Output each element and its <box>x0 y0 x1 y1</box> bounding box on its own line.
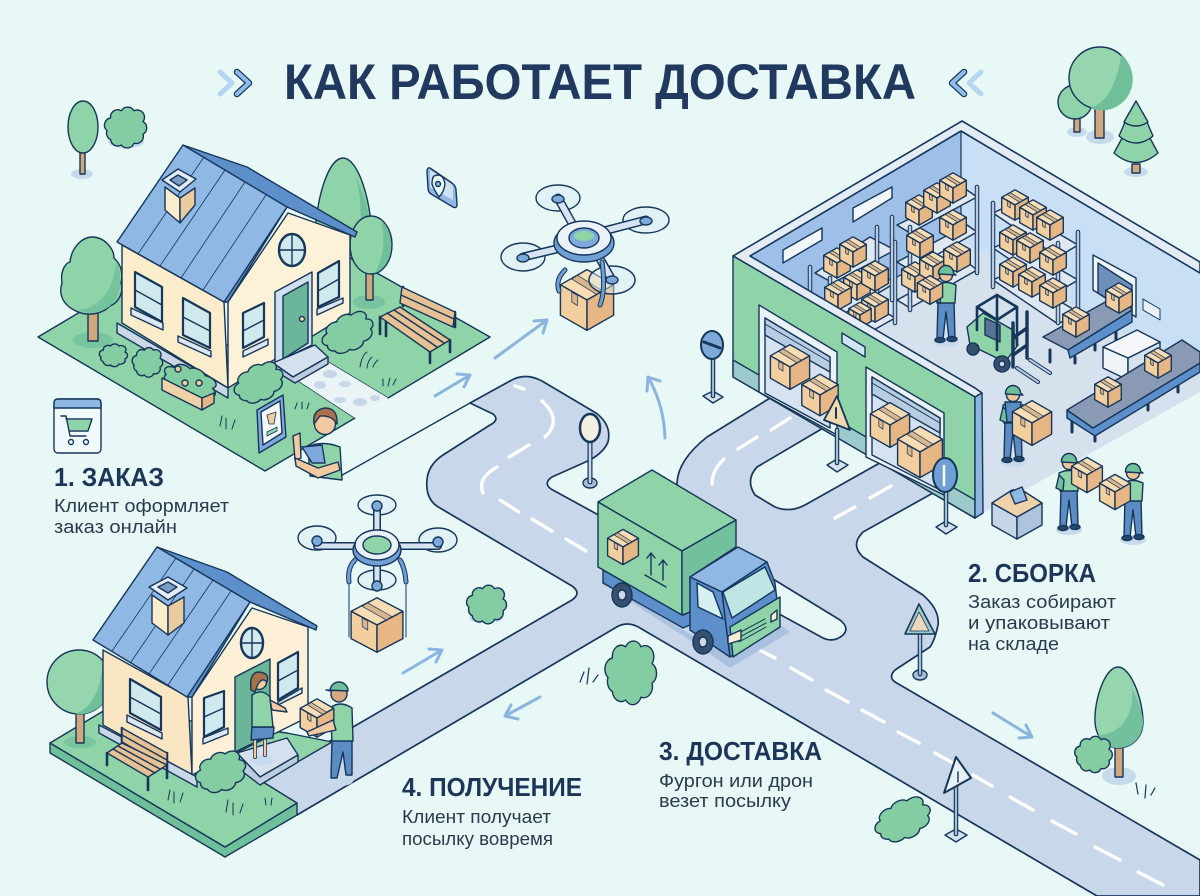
top-left tree and bush <box>68 101 147 179</box>
rear door and conveyor <box>1043 255 1136 363</box>
house walls <box>122 245 228 388</box>
frame <box>523 198 646 280</box>
title text: КАК РАБОТАЕТ ДОСТАВКА <box>284 54 916 110</box>
worker with box <box>1000 386 1052 467</box>
bottom bush <box>868 790 938 850</box>
warehouse <box>733 121 1200 518</box>
chimney <box>149 577 187 635</box>
wheels <box>612 583 632 607</box>
shelves with boxes <box>810 173 1078 335</box>
arrow 4 <box>403 649 442 673</box>
round window <box>241 628 263 658</box>
grass <box>168 790 272 815</box>
grille <box>730 597 780 657</box>
worker at shelf <box>917 266 959 347</box>
sign round blue near warehouse <box>701 331 723 403</box>
arrow 5 <box>505 697 540 719</box>
high windows <box>783 187 892 263</box>
step 3 text: 3. ДОСТАВКА <box>659 738 822 766</box>
rotors <box>501 185 669 294</box>
roof strip <box>157 547 317 697</box>
roof <box>117 145 287 302</box>
truck <box>597 470 790 668</box>
windows <box>723 567 775 618</box>
panel: house 1 order <box>38 145 490 480</box>
grass tufts <box>580 668 1155 798</box>
arrows <box>403 320 1032 738</box>
step 4 text: посылку вовремя <box>402 828 553 849</box>
roof <box>93 547 250 697</box>
lawn right <box>300 255 490 398</box>
left tree <box>61 237 122 348</box>
icon: location pin <box>427 168 457 208</box>
warning sign by dock <box>824 396 850 472</box>
floor <box>840 240 1200 513</box>
mid bushes <box>467 585 657 705</box>
arrow 3 <box>647 377 665 438</box>
step 4 text <box>402 774 582 849</box>
white crate <box>1103 330 1160 380</box>
dock door 1 <box>759 305 838 435</box>
motors <box>312 501 443 591</box>
chimney <box>162 169 196 223</box>
parcel <box>351 598 403 652</box>
roof seams <box>138 157 266 290</box>
green wall <box>733 256 975 518</box>
round window <box>279 234 305 266</box>
sign triangle bottom <box>944 757 971 842</box>
right tree and bush <box>1075 667 1143 785</box>
right interior wall <box>750 131 1200 513</box>
windows <box>131 261 343 357</box>
suspension lines <box>349 585 406 637</box>
step 1 text: 1. ЗАКАЗ <box>54 464 164 492</box>
panel: house 2 delivery <box>47 547 353 857</box>
dock door 2 <box>866 367 944 495</box>
motors <box>517 195 652 284</box>
wall note <box>1143 299 1160 320</box>
wall base <box>733 360 975 518</box>
truck road sign oval <box>580 414 600 488</box>
step 4 text: 4. ПОЛУЧЕНИЕ <box>402 774 582 802</box>
back tree <box>315 158 372 260</box>
lawn <box>50 710 332 857</box>
chassis <box>603 570 690 628</box>
step 4 text: Клиент получает <box>402 806 552 827</box>
shadow <box>597 580 790 668</box>
parcel <box>560 270 614 330</box>
path edge line <box>337 403 470 478</box>
foundation <box>99 725 197 787</box>
cargo box <box>598 470 736 551</box>
foundation <box>117 323 228 398</box>
arrow 1 <box>435 374 470 396</box>
drone 2 <box>298 495 457 652</box>
step 1 text: заказ онлайн <box>54 516 177 537</box>
arrow 2 <box>495 320 547 358</box>
left chevrons <box>220 72 249 94</box>
shelf 1 <box>810 227 895 335</box>
seams <box>112 558 231 685</box>
wall sign <box>842 333 865 357</box>
island by warehouse <box>750 424 885 510</box>
porch <box>237 738 298 785</box>
step 1 text: Клиент оформляет <box>54 495 230 516</box>
door <box>235 659 270 752</box>
right tree <box>350 216 392 309</box>
title <box>220 54 981 110</box>
cab <box>690 547 767 592</box>
tablet <box>257 395 286 453</box>
bench <box>380 287 455 363</box>
step 2 text: Заказ собирают <box>968 591 1117 612</box>
rotors <box>298 495 457 590</box>
step 3 text: Фургон или дрон <box>659 770 813 791</box>
right chevrons <box>952 72 981 94</box>
planter <box>157 356 222 410</box>
step 3 text <box>659 738 822 811</box>
customer <box>293 408 342 480</box>
step 2 text: на складе <box>968 633 1059 654</box>
porch step <box>273 345 328 383</box>
front conveyor <box>1067 340 1200 441</box>
shelf 2 <box>892 173 977 310</box>
shelf 3 <box>993 190 1078 324</box>
step 2 text <box>968 560 1117 654</box>
roof back strip <box>183 145 357 302</box>
open box <box>992 487 1042 539</box>
walls <box>103 650 192 775</box>
door <box>275 272 312 363</box>
drone 1 <box>501 185 669 330</box>
step 2 text: и упаковывают <box>968 612 1111 633</box>
round sign by dock <box>933 458 957 534</box>
bushes <box>99 305 380 410</box>
stone path <box>297 362 388 418</box>
wall end <box>975 393 983 518</box>
lawn left <box>38 290 355 471</box>
step 2 text: 2. СБОРКА <box>968 560 1096 588</box>
step 1 text <box>54 464 230 537</box>
bench <box>107 728 167 790</box>
frame <box>317 510 438 585</box>
forklift <box>967 295 1050 382</box>
courier <box>300 682 353 786</box>
top-right trees <box>1058 47 1158 177</box>
road surface <box>263 376 1200 896</box>
step 3 text: везет посылку <box>659 790 792 811</box>
tree <box>47 650 111 748</box>
sign triangle right <box>905 604 935 680</box>
windows <box>127 652 302 744</box>
recipient <box>250 672 287 765</box>
bush <box>190 745 252 799</box>
packers <box>1056 454 1146 545</box>
arrow 6 <box>993 713 1032 738</box>
rim <box>733 121 1200 397</box>
cargo marks <box>608 529 638 565</box>
icon: browser with cart <box>54 399 101 453</box>
road network <box>263 376 1200 896</box>
grass <box>220 352 396 429</box>
back interior wall <box>750 131 961 310</box>
lane dashes <box>482 386 1163 885</box>
